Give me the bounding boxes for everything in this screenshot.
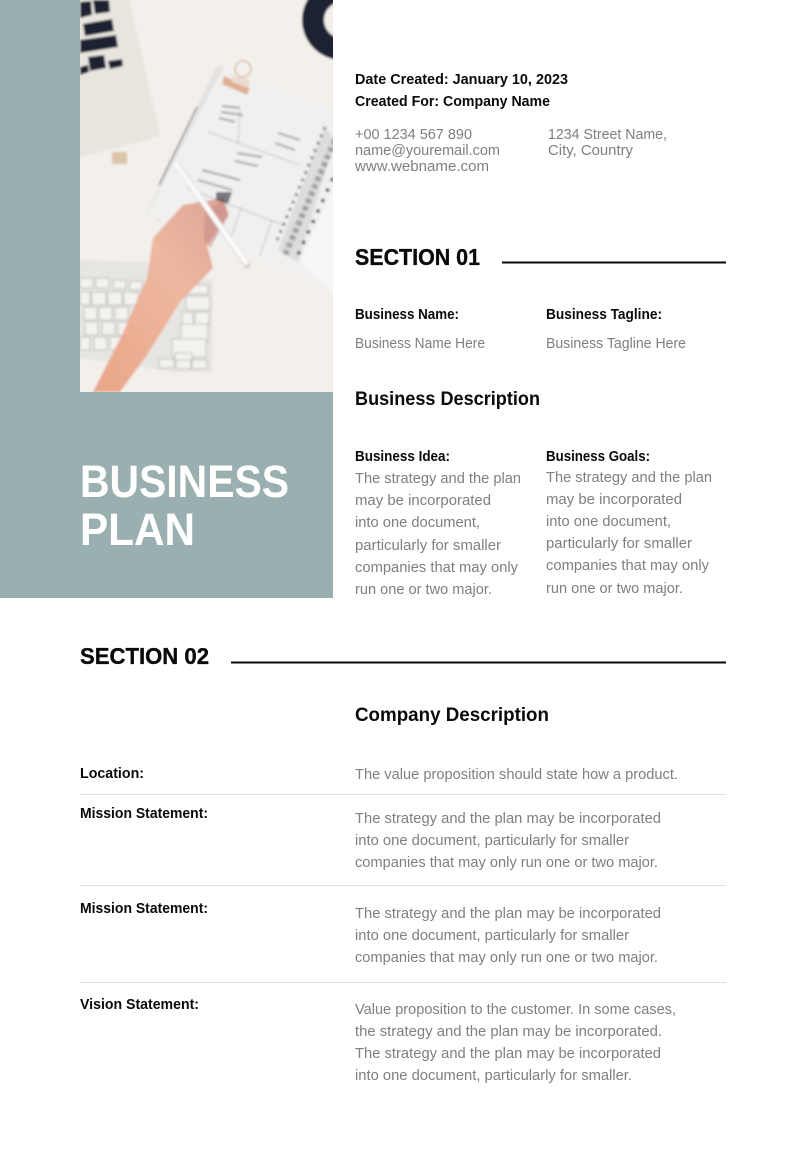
business tagline field bbox=[546, 307, 686, 352]
business tagline field: Business Tagline: bbox=[546, 307, 662, 323]
text block: business goals: companies that may only bbox=[546, 558, 710, 574]
heading: section 02: SECTION 02 bbox=[80, 643, 209, 669]
contact details bbox=[354, 127, 500, 175]
business name field: Business Name Here bbox=[355, 336, 485, 352]
business tagline field: Business Tagline Here bbox=[546, 336, 686, 352]
business name field: Business Name: bbox=[355, 307, 459, 323]
text block: business goals: may be incorporated bbox=[546, 492, 682, 508]
row: mission statement: companies that may only run one or two major. bbox=[355, 855, 658, 871]
photo: desk with laptop, planner, hand and keyboard bbox=[80, 0, 333, 392]
address bbox=[548, 127, 667, 159]
pen bbox=[178, 166, 247, 265]
row: vision statement: Value proposition to the customer. In some cases, bbox=[355, 1002, 676, 1018]
row: vision statement: into one document, particularly for smaller. bbox=[355, 1068, 632, 1084]
contact details: +00 1234 567 890 bbox=[355, 127, 472, 143]
text block: business idea: run one or two major. bbox=[355, 582, 492, 598]
text block: business idea: companies that may only bbox=[355, 560, 519, 576]
address: 1234 Street Name, bbox=[548, 127, 667, 143]
text block: business goals: run one or two major. bbox=[546, 581, 683, 597]
row: mission statement: into one document, particularly for smaller bbox=[355, 833, 629, 849]
row: location bbox=[80, 766, 678, 783]
text block: business idea: The strategy and the plan bbox=[355, 471, 521, 487]
heading: company description: Company Description bbox=[355, 704, 549, 726]
heading: section 01: SECTION 01 bbox=[355, 244, 480, 270]
text block: business goals: The strategy and the plan bbox=[546, 470, 712, 486]
row: location: The value proposition should state how a product. bbox=[355, 767, 678, 783]
text block: business idea: Business Idea: bbox=[355, 449, 450, 465]
row: mission statement second: companies that may only run one or two major. bbox=[355, 950, 658, 966]
keyboard bbox=[78, 260, 213, 372]
hand bbox=[93, 198, 228, 392]
address: City, Country bbox=[548, 143, 634, 159]
contact details: name@youremail.com bbox=[355, 143, 500, 159]
row: mission statement second: The strategy and the plan may be incorporated bbox=[355, 906, 661, 922]
row: mission statement bbox=[80, 806, 661, 871]
text block: business idea bbox=[355, 449, 521, 598]
text block: business idea: into one document, bbox=[355, 515, 480, 531]
row: mission statement: The strategy and the plan may be incorporated bbox=[355, 811, 661, 827]
laptop bbox=[78, 0, 158, 164]
panel: teal background bbox=[0, 0, 333, 598]
title: PLAN bbox=[80, 504, 195, 555]
text block: business idea: may be incorporated bbox=[355, 493, 491, 509]
text block: business goals: particularly for smaller bbox=[546, 536, 692, 552]
document details bbox=[355, 72, 568, 110]
planner bbox=[147, 61, 335, 292]
heading: business description: Business Description bbox=[355, 388, 540, 410]
row: vision statement: Vision Statement: bbox=[80, 997, 199, 1013]
row: vision statement bbox=[80, 997, 676, 1084]
text block: business goals bbox=[546, 449, 712, 597]
text block: business goals: Business Goals: bbox=[546, 449, 650, 465]
row: mission statement second bbox=[80, 901, 661, 966]
row: mission statement second: into one document, particularly for smaller bbox=[355, 928, 629, 944]
mug ring bbox=[300, 0, 333, 60]
row: mission statement second: Mission Statement: bbox=[80, 901, 208, 917]
text block: business idea: particularly for smaller bbox=[355, 538, 501, 554]
title: BUSINESS bbox=[80, 456, 289, 507]
document details: Date Created: January 10, 2023 bbox=[355, 72, 568, 88]
text block: business goals: into one document, bbox=[546, 514, 671, 530]
business name field bbox=[355, 307, 485, 352]
row: vision statement: The strategy and the plan may be incorporated bbox=[355, 1046, 661, 1062]
row: vision statement: the strategy and the plan may be incorporated. bbox=[355, 1024, 662, 1040]
contact details: www.webname.com bbox=[354, 159, 489, 175]
document details: Created For: Company Name bbox=[355, 94, 550, 110]
row: location: Location: bbox=[80, 766, 144, 782]
title bbox=[80, 456, 289, 555]
row: mission statement: Mission Statement: bbox=[80, 806, 208, 822]
